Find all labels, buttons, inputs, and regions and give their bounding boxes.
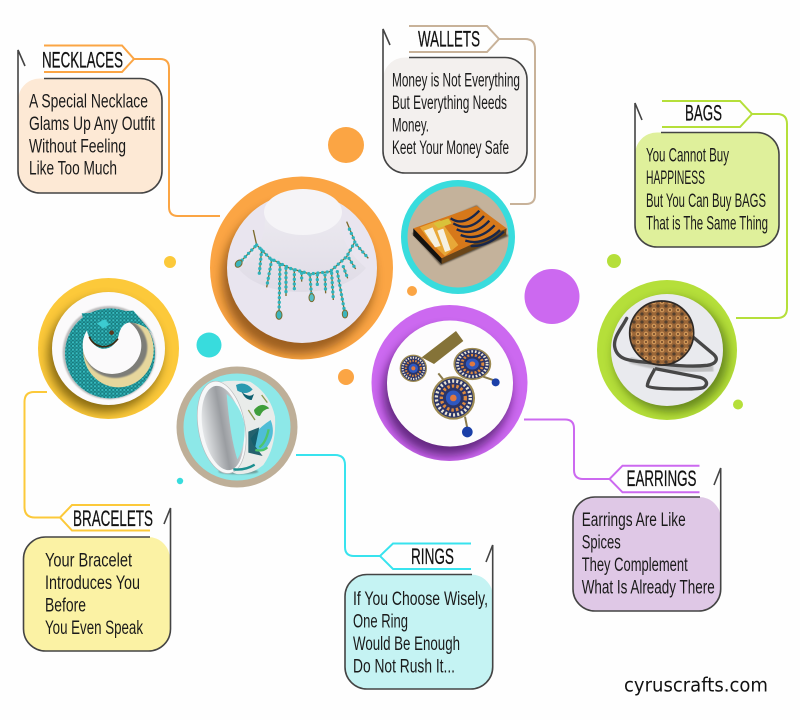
text: rings	[353, 589, 488, 678]
text: bracelets: Before	[45, 596, 86, 616]
text: rings: Do Not Rush It...	[353, 657, 455, 678]
panel: wallets	[383, 26, 535, 204]
image: bracelet circle	[38, 278, 179, 419]
callout box: bracelets	[23, 537, 170, 651]
text: wallets: Money is Not Everything	[392, 71, 520, 92]
text: necklaces	[29, 91, 156, 180]
callout box: wallets	[383, 58, 527, 173]
tag and connector: necklaces	[44, 46, 220, 216]
text: bracelets	[45, 551, 143, 639]
tag: rings	[380, 544, 471, 569]
image: earrings circle	[372, 305, 528, 461]
tag: earrings	[610, 466, 700, 492]
panel: bags	[635, 101, 787, 318]
connector: rings	[296, 455, 380, 556]
tag: bracelets	[60, 505, 150, 530]
text: earrings: Earrings Are Like	[582, 510, 686, 531]
tag and connector: bags	[662, 101, 787, 318]
outline and arrow: necklaces	[18, 50, 162, 193]
text: bags: You Cannot Buy	[646, 146, 729, 167]
image: ring circle	[176, 366, 298, 488]
website credit: cyruscrafts.com	[624, 674, 768, 697]
text: necklaces: Glams Up Any Outfit	[29, 114, 156, 135]
callout box: rings	[345, 574, 493, 689]
text: wallets	[392, 71, 520, 159]
text: necklaces: Like Too Much	[29, 159, 117, 180]
heading: rings: RINGS	[411, 544, 454, 569]
callout box: earrings	[573, 497, 721, 611]
callout box: necklaces	[18, 78, 162, 193]
panel: necklaces	[18, 46, 220, 216]
text: bags: HAPPINESS	[646, 168, 705, 189]
outline and arrow: rings	[345, 545, 493, 689]
text: necklaces: Without Feeling	[29, 136, 126, 157]
text: earrings: Spices	[582, 532, 621, 553]
heading: bags: BAGS	[685, 101, 722, 126]
text: earrings	[582, 510, 715, 598]
text: earrings: They Complement	[582, 555, 688, 576]
panel: rings	[296, 455, 493, 689]
panel: earrings	[524, 420, 721, 611]
outline and arrow: bags	[635, 103, 779, 247]
text: wallets: Keet Your Money Safe	[392, 138, 509, 159]
text: rings: One Ring	[353, 612, 408, 633]
text: wallets: But Everything Needs	[392, 93, 507, 114]
outline and arrow: wallets	[383, 29, 527, 173]
heading: earrings: EARRINGS	[626, 466, 696, 491]
outline and arrow: earrings	[573, 468, 721, 611]
outline and arrow: bracelets	[24, 508, 170, 651]
image: bag circle	[597, 280, 737, 420]
decorative dots	[164, 127, 743, 484]
text: bags	[646, 146, 768, 234]
heading: wallets: WALLETS	[418, 26, 480, 52]
text: earrings: What Is Already There	[582, 577, 715, 598]
text: bracelets: Introduces You	[45, 573, 140, 594]
heading: necklaces: NECKLACES	[42, 48, 123, 73]
tag and connector: wallets	[409, 26, 535, 204]
text: bracelets: You Even Speak	[45, 618, 143, 639]
text: necklaces: A Special Necklace	[29, 91, 148, 112]
connector: bracelets	[24, 392, 60, 518]
callout box: bags	[635, 132, 779, 247]
image: necklace circle	[210, 176, 393, 360]
heading: bracelets: BRACELETS	[73, 506, 153, 531]
connector: earrings	[524, 420, 609, 479]
panel: bracelets	[23, 392, 170, 651]
text: bracelets: Your Bracelet	[45, 551, 133, 572]
image: wallet circle	[401, 180, 515, 294]
text: rings: If You Choose Wisely,	[353, 589, 488, 610]
text: rings: Would Be Enough	[353, 634, 460, 655]
text: wallets: Money.	[392, 116, 429, 136]
